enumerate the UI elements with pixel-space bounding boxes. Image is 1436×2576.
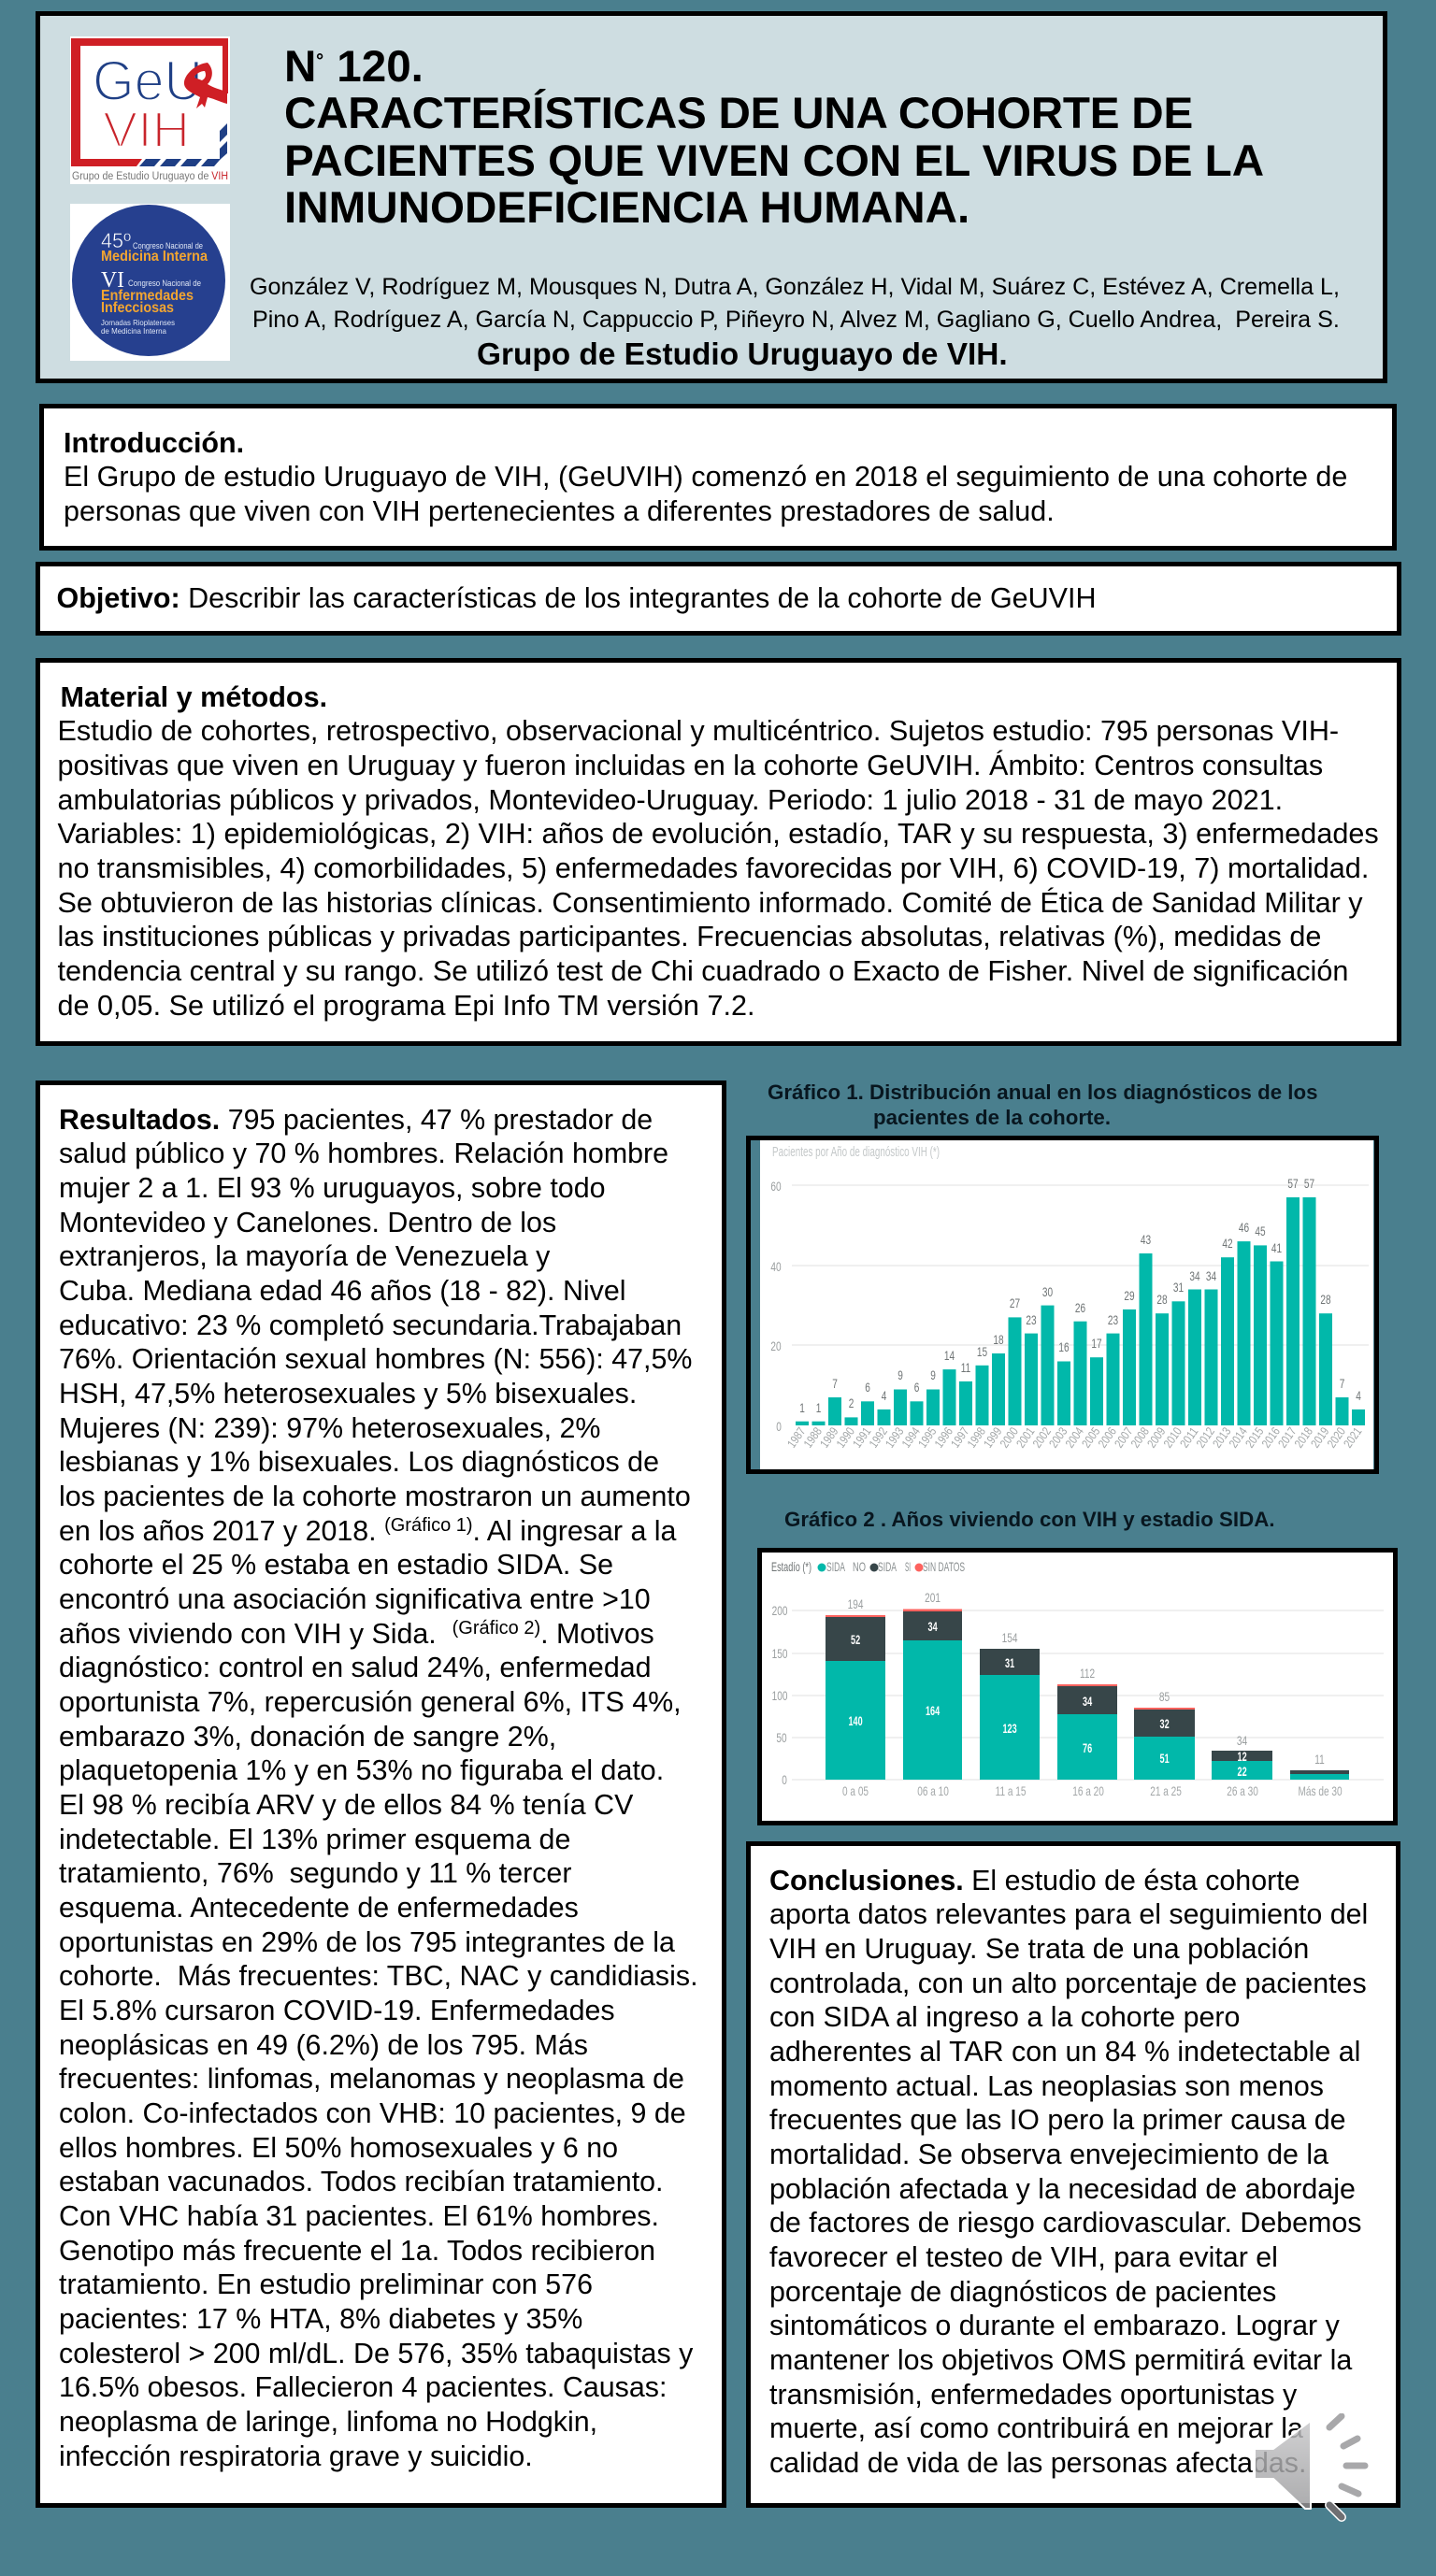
bar chart: pacientes por año: 2009: [1144, 1424, 1168, 1451]
icon: speaker: [1254, 2413, 1369, 2522]
stacked bar chart: estadio SIDA: 11: [1314, 1752, 1325, 1767]
stacked bar chart: estadio SIDA: 52: [851, 1632, 860, 1648]
bar chart: pacientes por año: 1995: [915, 1424, 939, 1451]
logo: congreso: [70, 204, 230, 361]
bar chart: pacientes por año: 28: [1320, 1292, 1331, 1307]
stacked bar chart: estadio SIDA: 200: [772, 1603, 788, 1618]
stacked bar chart: estadio SIDA: 32: [1160, 1716, 1170, 1732]
bar chart: pacientes por año: 2000: [997, 1424, 1021, 1451]
bar chart: pacientes por año: 42: [1222, 1236, 1233, 1251]
bar chart: pacientes por año: 1: [816, 1400, 822, 1415]
bar chart: pacientes por año: 57: [1287, 1176, 1299, 1191]
panel: conclusiones: [746, 1841, 1400, 2508]
objetivo text: Objetivo: Describir las características de los integrantes de la cohorte de GeUVIH: [56, 581, 1096, 613]
panel: gráfico 2: [757, 1548, 1398, 1825]
bar chart: pacientes por año: 23: [1108, 1312, 1118, 1327]
stacked bar chart: estadio SIDA: 123: [1003, 1721, 1017, 1737]
bar chart: pacientes por año: 16: [1058, 1339, 1070, 1354]
bar chart: pacientes por año: 6: [914, 1380, 920, 1395]
legend: [771, 1559, 965, 1574]
stacked bar chart: estadio SIDA: 06 a 10: [917, 1783, 949, 1798]
panel: header: [36, 11, 1387, 383]
logo: GeUVIH: Grupo de Estudio Uruguayo de VIH: [72, 171, 228, 182]
bar chart: pacientes por año: 2007: [1112, 1424, 1135, 1451]
bar chart: pacientes por año: 9: [930, 1367, 936, 1382]
logo: GeUVIH: [70, 36, 230, 184]
title: N˚ 120. CARACTERÍSTICAS DE UNA COHORTE DE PACIENTES QUE VIVEN CON EL VIRUS DE LA INMUNODEFICIENCIA HUMANA.: [284, 42, 1264, 233]
heading: gráfico 2: Gráfico 2 . Años viviendo con VIH y estadio SIDA.: [784, 1508, 1275, 1531]
bar chart: pacientes por año: 2002: [1029, 1424, 1054, 1451]
stacked bar chart: estadio SIDA: 194: [848, 1596, 864, 1611]
bar chart: pacientes por año: 43: [1141, 1232, 1151, 1247]
stacked bar chart: estadio SIDA: 154: [1002, 1630, 1018, 1645]
bar chart: pacientes por año: 15: [977, 1344, 987, 1359]
bar chart: pacientes por año: 1996: [931, 1424, 955, 1451]
bar chart: pacientes por año: 2010: [1160, 1424, 1185, 1451]
material y métodos text: Material y métodos. Estudio de cohortes, retrospectivo, observacional y multicéntrico. Sujetos estudio: 795 personas VIH- positivas que viven en Uruguay y fueron incluidas en la cohorte GeUVIH. Ámbito: Centros consultas ambulatorias públicos y privados, Montevideo-Uruguay. Periodo: 1 julio 2018 - 31 de mayo 2021. Variables: 1) epidemiológicas, 2) VIH: años de evolución, estadío, TAR y su respuesta, 3) enfermedades no transmisibles, 4) comorbilidades, 5) enfermedades favorecidas por VIH, 6) COVID-19, 7) mortalidad. Se obtuvieron de las historias clínicas. Consentimiento informado. Comité de Ética de Sanidad Militar y las instituciones públicas y privadas participantes. Frecuencias absolutas, relativas (%), medidas de tendencia central y su rango. Se utilizó test de Chi cuadrado o Exacto de Fisher. Nivel de significación de 0,05. Se utilizó el programa Epi Info TM versión 7.2.: [58, 680, 1379, 1022]
bar chart: pacientes por año: 7: [1340, 1376, 1345, 1391]
introducción text: Introducción. El Grupo de estudio Uruguayo de VIH, (GeUVIH) comenzó en 2018 el seguimiento de una cohorte de personas que viven con VIH pertenecientes a diferentes prestadores de salud.: [64, 426, 1347, 527]
bar chart: pacientes por año: 45: [1255, 1224, 1266, 1238]
logo: congreso: Congreso Nacional de: [128, 279, 201, 288]
bar chart: pacientes por año: 2013: [1210, 1424, 1233, 1451]
bar chart: pacientes por año: 2011: [1177, 1424, 1200, 1451]
logo: congreso: 45º: [101, 229, 131, 252]
stacked bar chart: estadio SIDA: 16 a 20: [1072, 1783, 1104, 1798]
bar chart: pacientes por año: 18: [993, 1332, 1004, 1347]
panel: objetivo: [36, 562, 1401, 636]
stacked bar chart: estadio SIDA: 201: [925, 1590, 941, 1605]
logo: congreso: Congreso Nacional de: [133, 241, 203, 250]
logo: GeUVIH: VIH: [103, 102, 190, 158]
bar chart: pacientes por año: 1990: [833, 1424, 857, 1451]
bar chart: pacientes por año: 2018: [1291, 1424, 1315, 1451]
bar chart: pacientes por año: 60: [770, 1179, 782, 1194]
stacked bar chart: estadio SIDA: 34: [1237, 1733, 1247, 1748]
bar chart: pacientes por año: 31: [1173, 1280, 1184, 1295]
bar chart: pacientes por año: 14: [944, 1348, 955, 1363]
bar chart: pacientes por año: 28: [1156, 1292, 1168, 1307]
stacked bar chart: estadio SIDA: 21 a 25: [1150, 1783, 1182, 1798]
bar chart: pacientes por año: 1987: [784, 1424, 808, 1451]
bar chart: pacientes por año: 17: [1091, 1336, 1102, 1351]
legend: SIDA: [826, 1559, 845, 1574]
bar chart: pacientes por año: 1999: [981, 1424, 1004, 1451]
bar chart: pacientes por año: 1997: [948, 1424, 971, 1451]
logo: GeUVIH: GeU: [93, 50, 203, 112]
stacked bar chart: estadio SIDA: 11 a 15: [996, 1783, 1027, 1798]
bar chart: pacientes por año: 1991: [850, 1424, 873, 1451]
bar chart: pacientes por año: 2021: [1341, 1424, 1364, 1451]
heading: gráfico 1: Gráfico 1. Distribución anual en los diagnósticos de los pacientes de la cohorte.: [768, 1080, 1318, 1129]
bar chart: pacientes por año: 57: [1304, 1176, 1314, 1191]
stacked bar chart: estadio SIDA: 34: [1083, 1694, 1092, 1710]
bar chart: pacientes por año: Pacientes por Año de diagnóstico VIH (*): [772, 1145, 940, 1160]
logo: congreso: Jornadas Rioplatenses: [101, 318, 175, 327]
bar chart: pacientes por año: 7: [832, 1376, 838, 1391]
panel: introducción: [39, 404, 1397, 551]
legend: SIDA: [878, 1559, 897, 1574]
bar chart: pacientes por año: 30: [1042, 1284, 1053, 1299]
logo: congreso: de Medicina Interna: [101, 326, 166, 336]
bar chart: pacientes por año: 2005: [1079, 1424, 1102, 1451]
stacked bar chart: estadio SIDA: 31: [1005, 1655, 1014, 1671]
panel: material y métodos: [36, 658, 1401, 1046]
legend: SI: [905, 1559, 911, 1574]
logo: congreso: Infecciosas: [101, 300, 174, 316]
bar chart: pacientes por año: 2016: [1258, 1424, 1283, 1451]
stacked bar chart: estadio SIDA: 140: [849, 1713, 863, 1729]
bar chart: pacientes por año: 29: [1124, 1288, 1135, 1303]
bar chart: pacientes por año: 2015: [1242, 1424, 1266, 1451]
bar chart: pacientes por año: 40: [770, 1259, 782, 1274]
stacked bar chart: estadio SIDA: Más de 30: [1299, 1783, 1343, 1798]
stacked bar chart: estadio SIDA: 85: [1159, 1689, 1170, 1704]
bar chart: pacientes por año: 2: [849, 1395, 854, 1410]
bar chart: pacientes por año: 1: [799, 1400, 805, 1415]
bar chart: pacientes por año: 20: [770, 1338, 782, 1353]
stacked bar chart: estadio SIDA: 22: [1238, 1764, 1247, 1780]
logo: congreso: Medicina Interna: [101, 249, 208, 265]
stacked bar chart: estadio SIDA: 0: [782, 1772, 787, 1787]
bar chart: pacientes por año: 1998: [964, 1424, 988, 1451]
bar chart: pacientes por año: 34: [1206, 1268, 1216, 1283]
bar chart: pacientes por año: 41: [1271, 1240, 1282, 1255]
panel: resultados: [36, 1080, 726, 2508]
conclusiones text: Conclusiones. El estudio de ésta cohorte aporta datos relevantes para el seguimiento del VIH en Uruguay. Se trata de una población controlada, con un alto porcentaje de pacientes con SIDA al ingreso a la cohorte pero adherentes al TAR con un 84 % indetectable al momento actual. Las neoplasias son menos frecuentes que las IO pero la primer causa de mortalidad. Se observa envejecimiento de la población afectada y la necesidad de abordaje de factores de riesgo cardiovascular. Debemos favorecer el testeo de VIH, para evitar el porcentaje de diagnósticos de pacientes sintomáticos o durante el embarazo. Lograr y mantener los objetivos OMS permitirá evitar la transmisión, enfermedades oportunistas y muerte, así como contribuirá en mejorar la calidad de vida de las personas afectadas.: [769, 1864, 1368, 2479]
bar chart: pacientes por año: 46: [1239, 1220, 1249, 1235]
bar chart: pacientes por año: 0: [776, 1419, 782, 1434]
bar chart: pacientes por año: 23: [1026, 1312, 1037, 1327]
bar chart: pacientes por año: 2012: [1193, 1424, 1217, 1451]
legend: SIN DATOS: [923, 1559, 965, 1574]
bar chart: pacientes por año: 1993: [883, 1424, 906, 1451]
bar chart: pacientes por año: 9: [898, 1367, 903, 1382]
bar chart: pacientes por año: 11: [961, 1360, 970, 1375]
stacked bar chart: estadio SIDA: 51: [1160, 1751, 1170, 1767]
bar chart: pacientes por año: 2003: [1046, 1424, 1070, 1451]
bar chart: pacientes por año: 2020: [1324, 1424, 1348, 1451]
affiliation: Grupo de Estudio Uruguayo de VIH.: [477, 337, 1008, 372]
stacked bar chart: estadio SIDA: 164: [926, 1703, 941, 1719]
stacked bar chart: estadio SIDA: 150: [772, 1646, 788, 1661]
stacked bar chart: estadio SIDA: 34: [928, 1619, 938, 1635]
bar chart: pacientes por año: [760, 1140, 1373, 1469]
bar chart: pacientes por año: 2017: [1275, 1424, 1299, 1451]
bar chart: pacientes por año: 2001: [1013, 1424, 1037, 1451]
legend: NO: [853, 1559, 866, 1574]
bar chart: pacientes por año: 1988: [800, 1424, 825, 1451]
stacked bar chart: estadio SIDA: 76: [1083, 1740, 1092, 1756]
bar chart: pacientes por año: 2008: [1127, 1424, 1152, 1451]
stacked bar chart: estadio SIDA: 0 a 05: [842, 1783, 869, 1798]
bar chart: pacientes por año: 34: [1189, 1268, 1200, 1283]
bar chart: pacientes por año: 1994: [898, 1424, 923, 1451]
bar chart: pacientes por año: 2006: [1095, 1424, 1119, 1451]
logo: congreso: VI: [101, 268, 124, 293]
stacked bar chart: estadio SIDA: 26 a 30: [1227, 1783, 1258, 1798]
stacked bar chart: estadio SIDA: 12: [1238, 1749, 1247, 1765]
panel: gráfico 1: [746, 1136, 1379, 1474]
bar chart: pacientes por año: 1989: [817, 1424, 840, 1451]
stacked bar chart: estadio SIDA: 50: [776, 1730, 787, 1745]
bar chart: pacientes por año: 4: [882, 1388, 887, 1403]
stacked bar chart: estadio SIDA: [771, 1559, 1384, 1798]
stacked bar chart: estadio SIDA: 100: [772, 1688, 788, 1703]
bar chart: pacientes por año: 26: [1075, 1300, 1085, 1315]
bar chart: pacientes por año: 2019: [1308, 1424, 1331, 1451]
logo: congreso: Enfermedades: [101, 288, 194, 304]
resultados text: Resultados. 795 pacientes, 47 % prestador de salud público y 70 % hombres. Relación hombre mujer 2 a 1. El 93 % uruguayos, sobre todo Montevideo y Canelones. Dentro de los extranjeros, la mayoría de Venezuela y Cuba. Mediana edad 46 años (18 - 82). Nivel educativo: 23 % completó secundaria.Trabajaban 76%. Orientación sexual hombres (N: 556): 47,5% HSH, 47,5% heterosexuales y 5% bisexuales. Mujeres (N: 239): 97% heterosexuales, 2% lesbianas y 1% bisexuales. Los diagnósticos de los pacientes de la cohorte mostraron un aumento en los años 2017 y 2018. (Gráfico 1). Al ingresar a la cohorte el 25 % estaba en estadio SIDA. Se encontró una asociación significativa entre >10 años viviendo con VIH y Sida. (Gráfico 2). Motivos diagnóstico: control en salud 24%, enfermedad oportunista 7%, repercusión general 6%, ITS 4%, embarazo 3%, donación de sangre 2%, plaquetopenia 1% y en 53% no figuraba el dato. El 98 % recibía ARV y de ellos 84 % tenía CV indetectable. El 13% primer esquema de tratamiento, 76% segundo y 11 % tercer esquema. Antecedente de enfermedades oportunistas en 29% de los 795 integrantes de la cohorte. Más frecuentes: TBC, NAC y candidiasis. El 5.8% cursaron COVID-19. Enfermedades neoplásicas en 49 (6.2%) de los 795. Más frecuentes: linfomas, melanomas y neoplasma de colon. Co-infectados con VHB: 10 pacientes, 9 de ellos hombres. El 50% homosexuales y 6 no estaban vacunados. Todos recibían tratamiento. Con VHC había 31 pacientes. El 61% hombres. Genotipo más frecuente el 1a. Todos recibieron tratamiento. En estudio preliminar con 576 pacientes: 17 % HTA, 8% diabetes y 35% colesterol > 200 ml/dL. De 576, 35% tabaquistas y 16.5% obesos. Fallecieron 4 pacientes. Causas: neoplasma de laringe, linfoma no Hodgkin, infección respiratoria grave y suicidio.: [59, 1103, 698, 2472]
bar chart: pacientes por año: 2014: [1226, 1424, 1250, 1451]
bar chart: pacientes por año: 27: [1010, 1295, 1020, 1310]
bar chart: pacientes por año: 6: [865, 1380, 870, 1395]
bar chart: pacientes por año: 2004: [1062, 1424, 1086, 1451]
stacked bar chart: estadio SIDA: 112: [1080, 1666, 1095, 1681]
legend: Estadío (*): [771, 1559, 811, 1574]
authors: González V, Rodríguez M, Mousques N, Dutra A, González H, Vidal M, Suárez C, Estévez A, Cremella L, Pino A, Rodríguez A, García N, Cappuccio P, Piñeyro N, Alvez M, Gagliano G, Cuello Andrea, Pereira S.: [250, 274, 1340, 333]
bar chart: pacientes por año: 4: [1356, 1388, 1361, 1403]
bar chart: pacientes por año: 1992: [866, 1424, 890, 1451]
